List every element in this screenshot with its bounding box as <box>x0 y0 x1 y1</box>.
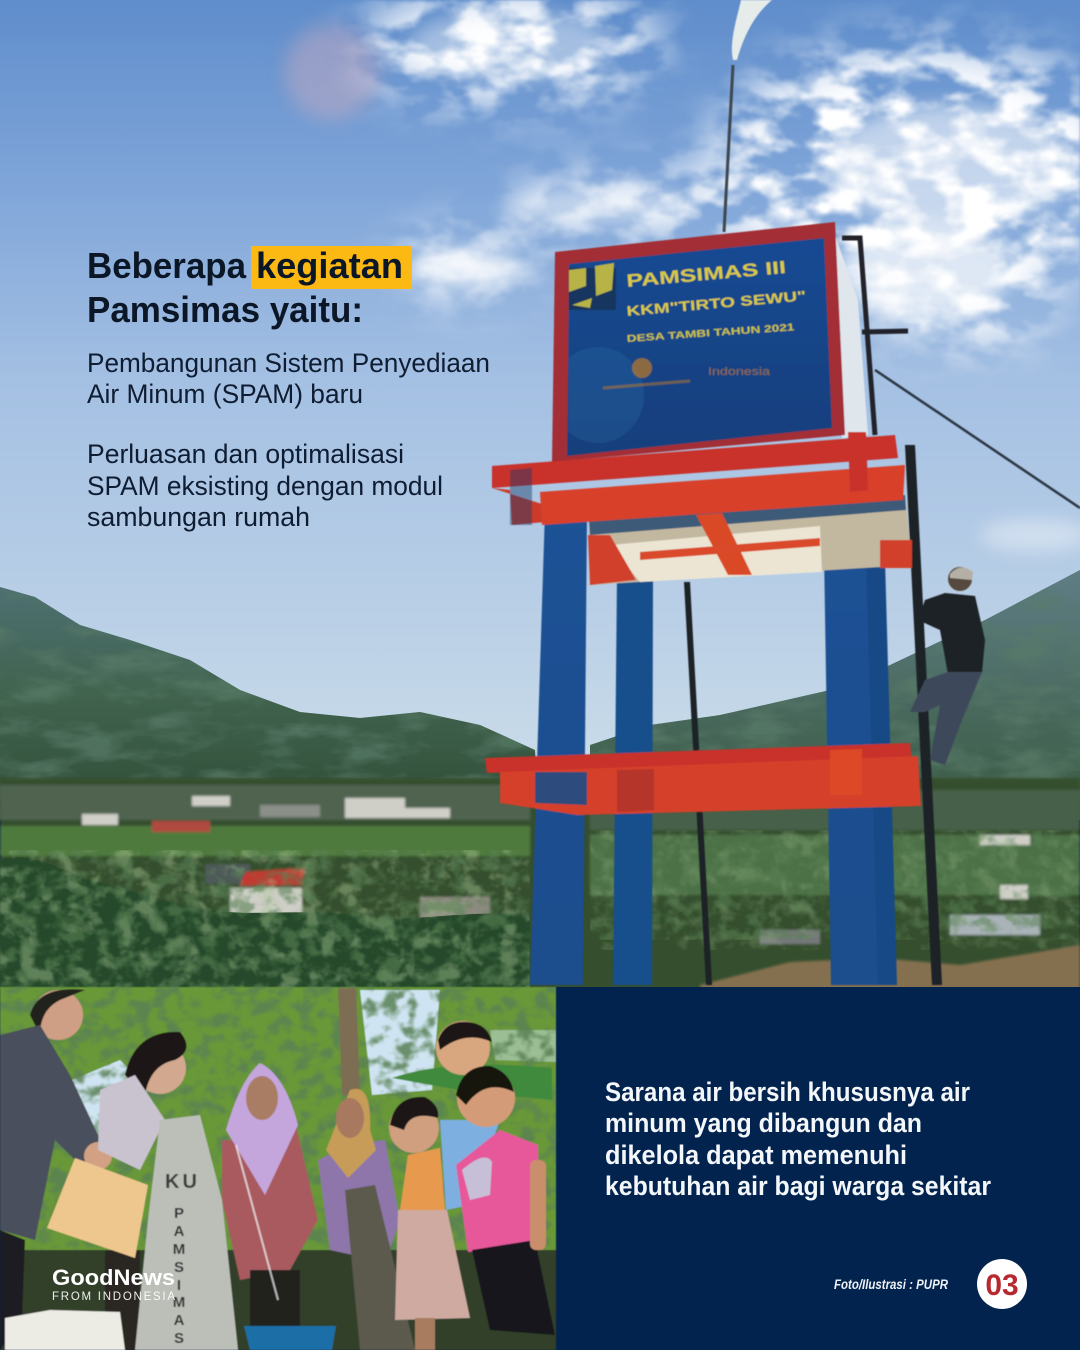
concrete tap post: P <box>174 1205 184 1222</box>
page number badge: 03 <box>985 1269 1019 1302</box>
heading: kegiatan <box>256 245 403 286</box>
tank cylinder and ladder rail <box>835 235 1080 508</box>
jerry cans <box>5 1158 148 1350</box>
woman in lilac hijab <box>222 1063 318 1330</box>
heading <box>87 245 412 330</box>
logo: GoodNews from Indonesia: GoodNews <box>52 1265 175 1290</box>
heading: Pamsimas yaitu: <box>87 289 363 330</box>
photo backdrop <box>0 987 556 1350</box>
small girl <box>389 1097 470 1350</box>
front legs <box>530 490 878 985</box>
navy panel <box>556 987 1080 1350</box>
concrete tap post: KU <box>165 1171 197 1193</box>
tall child behind <box>436 1021 500 1210</box>
heading: Beberapa <box>87 245 247 286</box>
concrete tap post: M <box>173 1241 185 1258</box>
woman with dark jacket <box>0 989 112 1350</box>
activity 2 text: sambungan rumah <box>87 502 310 532</box>
activity 2 text: SPAM eksisting dengan modul <box>87 471 443 501</box>
activity 2 text: Perluasan dan optimalisasi <box>87 439 404 469</box>
tank sign: Indonesia <box>708 366 771 378</box>
concrete tap post <box>135 1115 238 1350</box>
top platform <box>492 432 912 585</box>
background photo: water tower against sky and mountains <box>0 0 1080 990</box>
woman in white <box>98 1032 186 1350</box>
panel description text: kebutuhan air bagi warga sekitar <box>605 1171 991 1201</box>
concrete tap post: S <box>174 1330 184 1347</box>
far legs <box>684 445 942 985</box>
boy in pink shirt <box>456 1066 555 1335</box>
photo credit: Foto/Ilustrasi : PUPR <box>834 1277 948 1292</box>
woman in tan hijab <box>318 1089 415 1350</box>
logo: GoodNews from Indonesia <box>52 1265 175 1303</box>
water tower <box>485 0 1080 985</box>
concrete tap post: S <box>174 1259 184 1276</box>
mountains <box>0 570 1080 820</box>
panel description text: dikelola dapat memenuhi <box>605 1140 907 1170</box>
logo: GoodNews from Indonesia: FROM INDONESIA <box>52 1291 175 1303</box>
activity 1 text <box>87 348 490 409</box>
tank sign <box>552 222 845 462</box>
bucket <box>244 1326 336 1350</box>
foreground trees and rubble <box>0 830 1080 990</box>
tank sign: PAMSIMAS III <box>626 257 787 291</box>
tank sign: DESA TAMBI TAHUN 2021 <box>626 322 795 345</box>
activity 1 text: Pembangunan Sistem Penyediaan <box>87 348 490 378</box>
climbing man <box>910 567 985 765</box>
concrete tap post: A <box>174 1312 185 1329</box>
pole and flag <box>724 0 772 232</box>
concrete tap post: M <box>173 1294 185 1311</box>
concrete tap post: A <box>174 1223 185 1240</box>
lower-left photo: villagers at Pamsimas tap <box>0 987 556 1350</box>
panel description text: minum yang dibangun dan <box>605 1108 922 1138</box>
panel description text <box>605 1077 991 1201</box>
tank sign: KKM"TIRTO SEWU" <box>626 287 807 319</box>
activity 1 text: Air Minum (SPAM) baru <box>87 379 363 409</box>
sky with clouds <box>0 0 1080 760</box>
highlight behind kegiatan <box>251 246 412 289</box>
activity 2 text <box>87 439 443 532</box>
page number badge <box>977 1259 1027 1309</box>
lower platform <box>485 743 921 815</box>
panel description text: Sarana air bersih khususnya air <box>605 1077 970 1107</box>
village and fields <box>0 778 1080 990</box>
concrete tap post: I <box>177 1277 181 1294</box>
